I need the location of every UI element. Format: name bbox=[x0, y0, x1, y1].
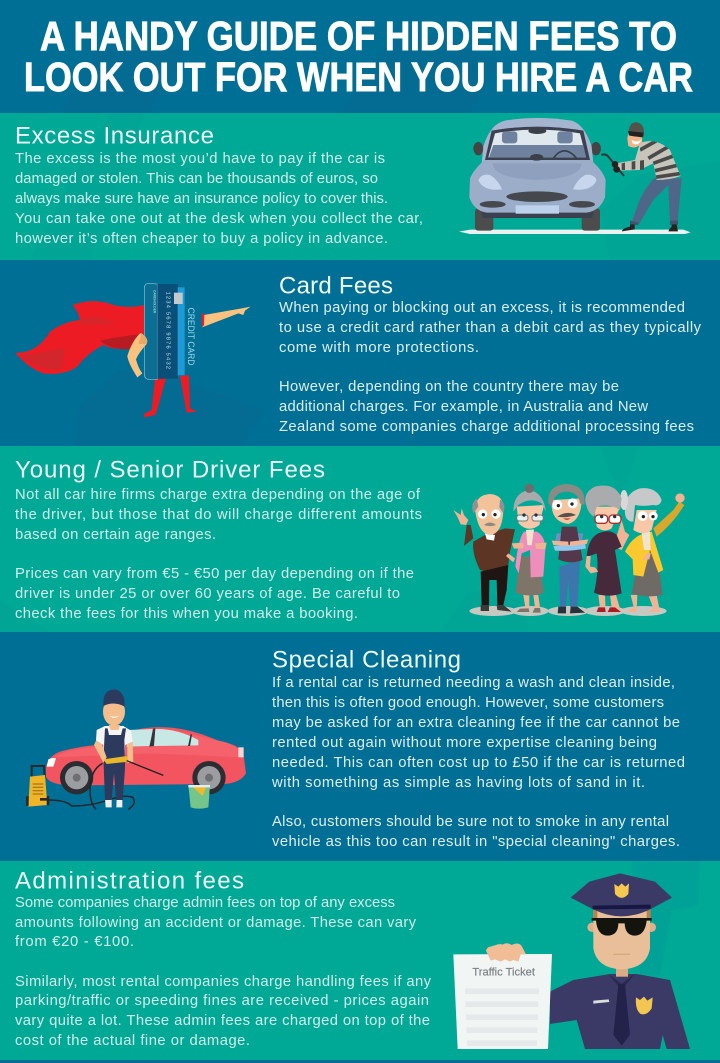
hose bbox=[47, 763, 134, 809]
text block: administration fees: cost of the actual fine or damage. bbox=[15, 1033, 250, 1049]
card text bbox=[152, 290, 196, 369]
heading: young and senior driver fees: Young / Senior Driver Fees bbox=[15, 456, 325, 484]
text block: young and senior driver fees: driver is under 25 or over 60 years of age. Be careful to bbox=[15, 586, 400, 602]
text block: card fees: to use a credit card rather than a debit card as they typically bbox=[279, 320, 702, 336]
text block: young and senior driver fees bbox=[15, 487, 422, 622]
card text: CREDIT CARD bbox=[186, 308, 196, 366]
text block: special cleaning: with something as simple as having lots of sand in it. bbox=[271, 775, 645, 791]
text block: administration fees: vary quite a lot. These admin fees are charged on top of the bbox=[15, 1013, 430, 1029]
text block: card fees: When paying or blocking out an excess, it is recommended bbox=[279, 300, 685, 316]
text block: special cleaning: needed. This can often cost up to £50 if the car is returned bbox=[272, 755, 685, 771]
heading: excess insurance: Excess Insurance bbox=[15, 122, 214, 150]
panel: special cleaning bbox=[0, 632, 720, 861]
officer hat bbox=[571, 873, 672, 916]
text block: card fees bbox=[279, 300, 702, 435]
text block: card fees: Zealand some companies charge additional processing fees bbox=[279, 419, 694, 435]
senior 1 bbox=[453, 494, 515, 612]
senior 3 bbox=[548, 484, 588, 613]
icon: group of seniors bbox=[453, 484, 685, 616]
text block: excess insurance: however it’s often cheaper to buy a policy in advance. bbox=[15, 231, 388, 247]
sunglasses bbox=[592, 918, 652, 936]
traffic ticket bbox=[453, 954, 552, 1049]
text block: card fees: additional charges. For example, in Australia and New bbox=[279, 399, 648, 415]
heading: special cleaning: Special Cleaning bbox=[272, 646, 461, 674]
officer head bbox=[616, 965, 628, 977]
text block: administration fees: Similarly, most rental companies charge handling fees if any bbox=[15, 974, 432, 990]
text block: special cleaning: then this is often good enough. However, some customers bbox=[272, 695, 664, 711]
title bbox=[24, 13, 693, 100]
text block: special cleaning: may be asked for an extra cleaning fee if the car cannot be bbox=[272, 715, 680, 731]
red car bbox=[46, 727, 246, 794]
text block: administration fees: parking/traffic or speeding fines are received - prices again bbox=[15, 993, 429, 1009]
text block: administration fees: Some companies charge admin fees on top of any excess bbox=[15, 895, 395, 911]
text block: young and senior driver fees: Prices can vary from €5 - €50 per day depending on if the bbox=[15, 566, 414, 582]
text block: special cleaning bbox=[271, 675, 685, 850]
panel: administration fees bbox=[0, 861, 720, 1060]
text block: card fees: come with more protections. bbox=[279, 340, 479, 356]
officer body bbox=[550, 974, 690, 1049]
text block: administration fees bbox=[15, 895, 432, 1049]
panel: card fees bbox=[0, 260, 720, 446]
text block: young and senior driver fees: check the fees for this when you make a booking. bbox=[15, 606, 358, 622]
traffic ticket: Traffic Ticket bbox=[472, 966, 535, 978]
senior 2 bbox=[512, 484, 547, 613]
text block: administration fees: from €20 - €100. bbox=[15, 934, 134, 950]
text block: young and senior driver fees: Not all car hire firms charge extra depending on the age of bbox=[15, 487, 421, 503]
text block: excess insurance: The excess is the most you’d have to pay if the car is bbox=[15, 151, 385, 167]
pressure washer bbox=[26, 766, 49, 807]
icon: car and thief bbox=[459, 118, 691, 234]
heading: card fees: Card Fees bbox=[279, 272, 393, 300]
text block: excess insurance: always make sure have an insurance policy to cover this. bbox=[15, 191, 388, 207]
bucket bbox=[188, 785, 210, 809]
senior 5 bbox=[620, 488, 685, 612]
icon: worker washing red car bbox=[26, 689, 246, 809]
icon: credit card superhero bbox=[15, 283, 251, 417]
fingers bbox=[486, 943, 526, 962]
text block: excess insurance: You can take one out at the desk when you collect the car, bbox=[15, 211, 423, 227]
senior 4 bbox=[585, 486, 629, 612]
text block: young and senior driver fees: the driver, but those that do will charge different amounts bbox=[15, 507, 422, 523]
footer strip bbox=[0, 1060, 720, 1063]
text block: administration fees: amounts following an accident or damage. These can vary bbox=[15, 915, 417, 931]
heading: administration fees: Administration fees bbox=[15, 868, 244, 894]
header panel bbox=[0, 0, 720, 113]
text block: young and senior driver fees: based on certain age ranges. bbox=[15, 527, 216, 543]
icon: police officer with traffic ticket bbox=[453, 873, 690, 1049]
panel: excess insurance bbox=[0, 113, 720, 260]
card text: 1234 5678 9876 5432 bbox=[165, 292, 171, 369]
card text: CARDHOLDER bbox=[152, 290, 157, 313]
panel: young and senior driver fees bbox=[0, 446, 720, 632]
text block: excess insurance bbox=[15, 151, 423, 247]
text block: special cleaning: rented out again without more expertise cleaning being bbox=[272, 735, 657, 751]
text block: excess insurance: damaged or stolen. This can be thousands of euros, so bbox=[15, 171, 378, 187]
worker bbox=[94, 689, 163, 807]
text block: special cleaning: vehicle as this too can result in "special cleaning" charges. bbox=[272, 834, 680, 850]
text block: special cleaning: If a rental car is returned needing a wash and clean inside, bbox=[272, 675, 675, 691]
text block: card fees: However, depending on the country there may be bbox=[279, 379, 619, 395]
text block: special cleaning: Also, customers should be sure not to smoke in any rental bbox=[272, 814, 669, 830]
